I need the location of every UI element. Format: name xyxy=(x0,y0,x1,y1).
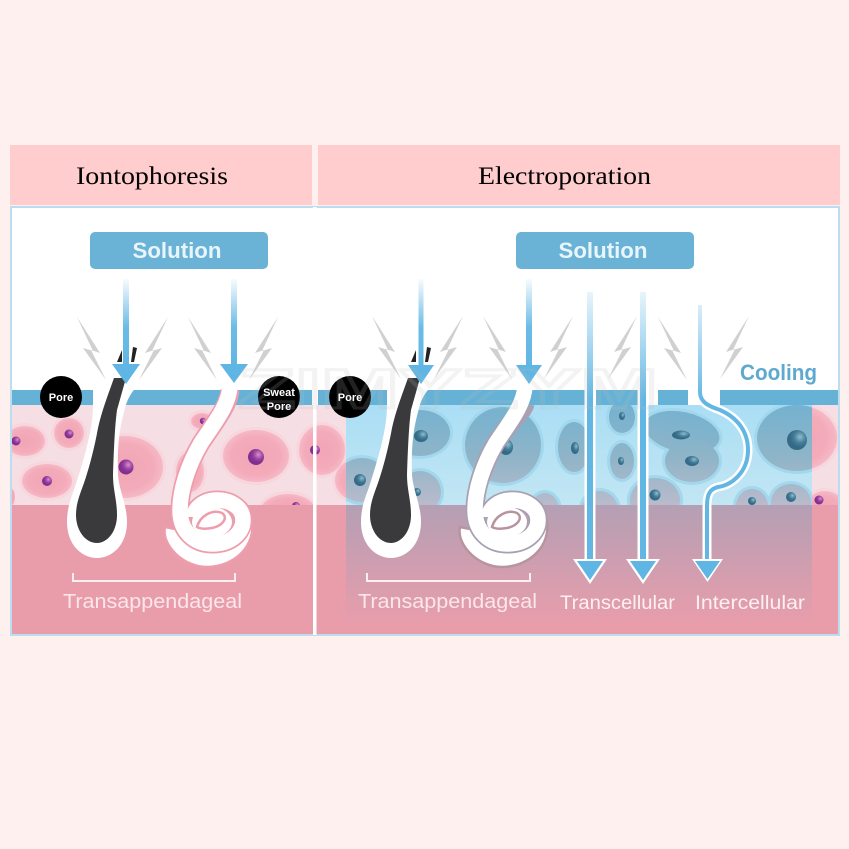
right panel: hair follicle xyxy=(361,347,431,558)
epidermis blue band xyxy=(12,390,838,405)
label: Sweat Pore xyxy=(258,376,300,418)
arrow: right sweat pore xyxy=(516,279,542,384)
label: Pore right: Pore xyxy=(338,392,362,404)
label: Intercellular: Intercellular xyxy=(695,593,806,614)
header: Electroporation xyxy=(318,145,840,205)
right panel: sweat duct xyxy=(460,386,548,567)
label: Transappendageal right: Transappendageal xyxy=(358,591,537,613)
label: Transappendageal left: Transappendageal xyxy=(63,591,242,613)
arrow: right pore xyxy=(408,279,434,384)
left panel: hair follicle xyxy=(67,347,137,558)
vertical divider between panels xyxy=(313,207,316,635)
bracket: right transappendageal xyxy=(367,573,530,581)
skin cells: pink layer xyxy=(12,405,838,505)
label: Sweat Pore: Pore xyxy=(267,401,291,413)
header: Iontophoresis: Iontophoresis xyxy=(76,163,228,190)
left panel: sweat duct xyxy=(165,386,253,567)
label: Sweat Pore: Sweat xyxy=(263,387,295,399)
label: Transcellular: Transcellular xyxy=(560,593,676,614)
solution box: left: Solution xyxy=(132,238,222,263)
arrow: transcellular 1 xyxy=(573,292,607,584)
skin cells: blue cooled layer xyxy=(346,405,812,505)
bracket: left transappendageal xyxy=(73,573,235,581)
label: Cooling: Cooling xyxy=(740,360,817,385)
solution box: left xyxy=(90,232,268,269)
label: Pore left: Pore xyxy=(49,392,73,404)
label: Pore right xyxy=(329,376,371,418)
cooled dermis gradient xyxy=(346,505,812,630)
arrow: left sweat pore xyxy=(220,279,248,383)
header: Iontophoresis xyxy=(10,145,312,205)
lightning bolts xyxy=(77,316,749,380)
diagram panel background xyxy=(11,207,839,635)
watermark: ZIMYZYM xyxy=(238,357,658,420)
header: Electroporation: Electroporation xyxy=(478,163,652,190)
solution box: right: Solution xyxy=(558,238,648,263)
arrow: left pore xyxy=(112,279,140,384)
label: Pore left xyxy=(40,376,82,418)
arrow: transcellular 2 xyxy=(626,292,660,584)
solution box: right xyxy=(516,232,694,269)
arrow: intercellular curving path xyxy=(692,305,748,582)
